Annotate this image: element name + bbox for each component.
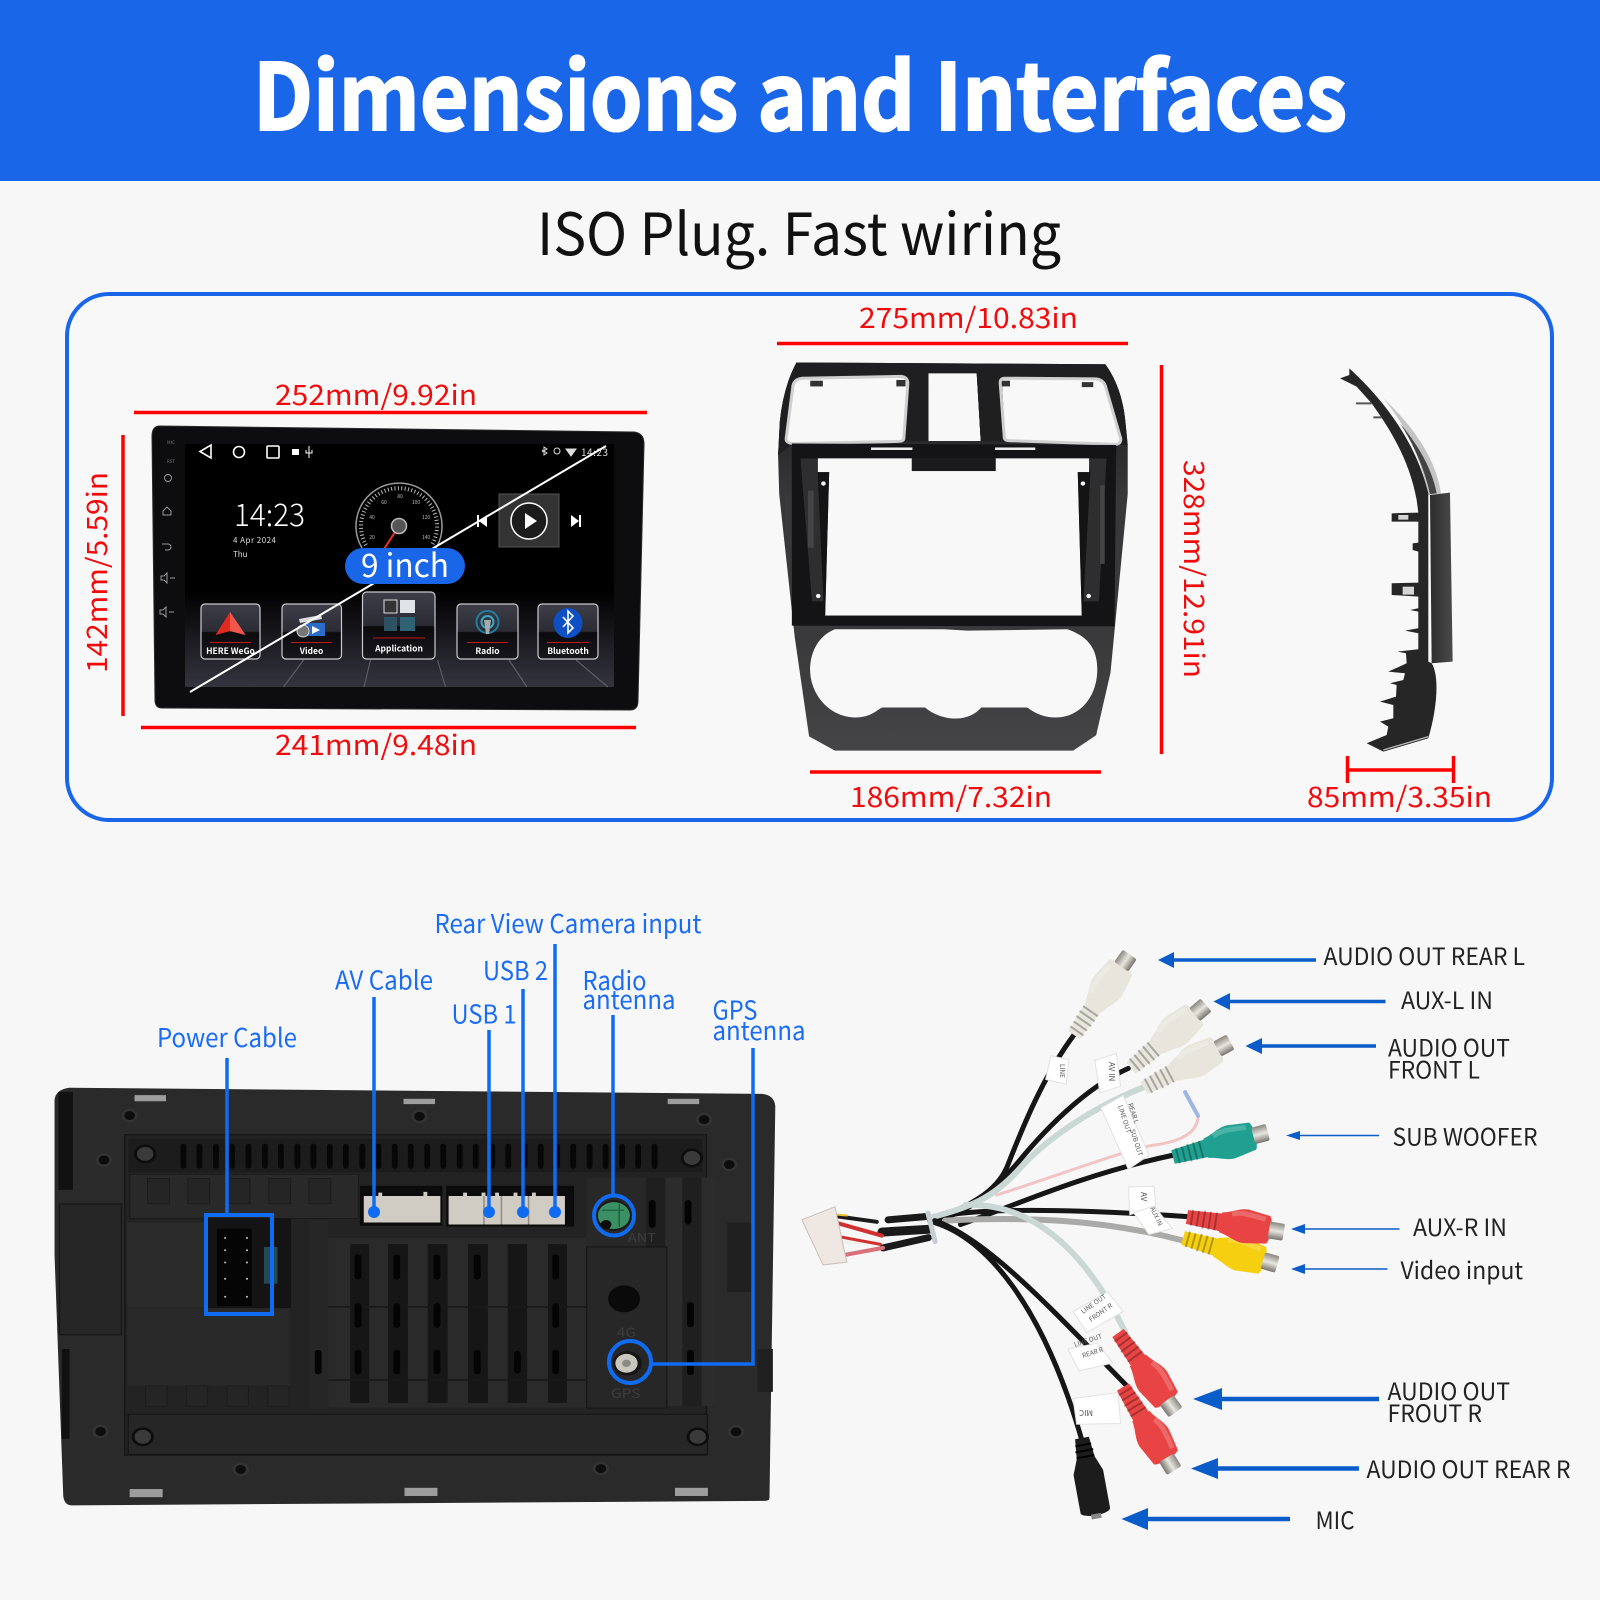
label: AUX-L IN: AUX-L IN [1401, 981, 1493, 1016]
lower left tabs [146, 1386, 289, 1406]
arrow: video input [1291, 1264, 1388, 1274]
side chrome strip [1383, 398, 1441, 495]
arrow: sub woofer [1286, 1131, 1379, 1140]
USB connectors [449, 1193, 565, 1225]
size badge: 9 inch [361, 541, 449, 587]
cable tag text: REAR L [1126, 1102, 1142, 1125]
cable tag text: LINE OUT [1078, 1291, 1108, 1316]
bezel labels [167, 440, 175, 465]
plug: white audio out rear L [1060, 945, 1144, 1045]
callout: USB 2: USB 2 [483, 951, 548, 988]
label: AUDIO OUT FROUT R: AUDIO OUT [1388, 1372, 1510, 1407]
callout: Radio antenna: antenna [582, 980, 676, 1017]
side clip centers [1398, 515, 1414, 595]
arrow: audio out rear R [1191, 1458, 1359, 1479]
side main silhouette [1340, 368, 1436, 752]
callout: USB 1: USB 1 [452, 994, 516, 1032]
left flap [59, 1204, 121, 1335]
plug: white audio out front L [1136, 1027, 1239, 1103]
cable tie [928, 1213, 935, 1242]
cable tag text: SUB OUT [1128, 1128, 1146, 1157]
vent slots [181, 1144, 658, 1169]
label: AUDIO OUT REAR L: AUDIO OUT REAR L [1324, 937, 1525, 972]
status clock: 14:23 [581, 444, 608, 459]
fascia side view [1340, 368, 1453, 752]
right flap [727, 1222, 773, 1392]
plug: white aux L [1120, 992, 1217, 1081]
screen floor glow [185, 590, 614, 687]
label: AUDIO OUT FROUT R [1388, 1372, 1510, 1429]
callout: AV Cable: AV Cable [335, 960, 433, 998]
app tile: Application [362, 592, 435, 659]
cable tag text: AV [1138, 1192, 1149, 1202]
callout: GPS antenna: antenna [712, 1011, 806, 1048]
app tile: Video: Video [299, 645, 323, 657]
fascia frame front view [778, 362, 1128, 751]
cable tag text: LINE OUT [1073, 1330, 1103, 1349]
side lower lip [1383, 737, 1428, 750]
callout: Power Cable [157, 1018, 297, 1314]
title: Dimensions and Interfaces [253, 24, 1347, 157]
callout: Rear View Camera input [434, 904, 702, 1218]
app tile: Bluetooth [538, 604, 598, 659]
cable tag text: LINE OUT [1116, 1104, 1135, 1134]
mounting holes [94, 1110, 743, 1475]
antenna bay [587, 1178, 646, 1247]
arrow: aux R in [1291, 1224, 1400, 1234]
app tile: HERE WeGo [201, 604, 260, 659]
head unit front view [152, 426, 644, 710]
label: AUDIO OUT FROUT R: FROUT R [1388, 1394, 1482, 1429]
dimension: height of unit: 142mm/5.59in [76, 472, 116, 673]
label: AUX-R IN: AUX-R IN [1413, 1208, 1507, 1243]
arrow: aux L in [1214, 993, 1386, 1010]
label: AUDIO OUT FRONT L: AUDIO OUT [1388, 1028, 1510, 1064]
back panel of head unit [55, 1088, 775, 1505]
subtitle: ISO Plug. Fast wiring [537, 188, 1061, 272]
device body [152, 426, 644, 710]
screen [185, 444, 614, 687]
bezel labels: RST [167, 459, 175, 465]
callout: Radio antenna [582, 961, 676, 1236]
bottom band [128, 1414, 707, 1454]
fascia vent hooks [810, 380, 1093, 387]
gps bay [587, 1247, 667, 1408]
fascia top dark band [778, 362, 1128, 455]
plug: yellow video [1178, 1222, 1282, 1281]
callout: Rear View Camera input: Rear View Camera input [434, 904, 702, 941]
dimension: fascia height: 328mm/12.91in [1175, 460, 1215, 678]
callout: GPS antenna: GPS [712, 990, 758, 1028]
label: AUDIO OUT FRONT L [1388, 1028, 1510, 1086]
dimension: fascia bottom width: 186mm/7.32in [850, 776, 1052, 816]
app tile: Radio [457, 604, 518, 659]
side body panel [1430, 493, 1453, 663]
cable tag text: LINE [1058, 1064, 1068, 1078]
dimension: bottom width of unit: 241mm/9.48in [275, 724, 477, 764]
speedometer: 80 [397, 493, 403, 500]
bezel icons [160, 474, 175, 617]
app tile: Video [282, 604, 342, 659]
fascia top tab [912, 458, 996, 471]
socket labels: 4G [617, 1322, 636, 1341]
callout: AV Cable [335, 960, 433, 1218]
speedometer: 140 [422, 534, 430, 541]
arrow: audio out front L [1246, 1038, 1376, 1054]
dimension: fascia top width: 275mm/10.83in [859, 297, 1078, 337]
inner recess [125, 1135, 706, 1455]
AV connector [364, 1192, 440, 1222]
arrow: audio out rear L [1158, 952, 1316, 968]
speedometer: 20 [369, 534, 375, 541]
label: MIC: MIC [1316, 1501, 1354, 1536]
app tile: Application: Application [374, 642, 423, 654]
app tile: Radio: Radio [475, 645, 500, 657]
socket labels [611, 1227, 656, 1403]
label: Video input: Video input [1400, 1251, 1523, 1286]
header banner [0, 0, 1600, 181]
screws [133, 1146, 707, 1445]
status bar icons [542, 447, 576, 456]
callout: USB 1 [452, 994, 516, 1218]
dimension: depth: 85mm/3.35in [1307, 776, 1492, 816]
side chrome shadow [1400, 423, 1437, 494]
fascia inner rim [792, 444, 1116, 626]
speedometer: 120 [422, 514, 430, 521]
callout: GPS antenna [609, 990, 806, 1383]
upper shelf [130, 1174, 358, 1218]
left connector block [127, 1222, 205, 1307]
wiring harness [802, 1035, 1198, 1440]
chrome tabs [130, 1095, 708, 1497]
fascia slot surrounds [904, 374, 1005, 441]
radio antenna socket [595, 1200, 632, 1231]
plug: red audio out rear R [1109, 1378, 1189, 1479]
app tile: HERE WeGo: HERE WeGo [206, 645, 255, 657]
socket labels: ANT [628, 1227, 656, 1246]
cable tag text [1058, 1062, 1166, 1418]
speedometer: 40 [369, 514, 375, 521]
fascia side slots [808, 485, 1105, 564]
bezel labels: MIC [167, 440, 175, 446]
cable tag text: FRONT R [1086, 1300, 1114, 1324]
callout: Power Cable: Power Cable [157, 1018, 297, 1055]
panel: dimensions [67, 294, 1552, 820]
power connector bay [205, 1218, 291, 1308]
connector bay dark [360, 1186, 574, 1227]
date: 4 Apr 2024 [233, 535, 277, 546]
nav bar icons [200, 445, 312, 458]
weekday: Thu [233, 549, 248, 560]
clock: 14:23 [234, 490, 305, 535]
side pins [1356, 403, 1382, 417]
fascia chrome vent trim [786, 376, 1121, 444]
speedometer [356, 483, 442, 549]
plug: red aux R [1184, 1200, 1286, 1249]
music player [477, 494, 581, 547]
harness connector [802, 1207, 847, 1265]
speedometer: 100 [412, 499, 420, 506]
fascia bracket holes [816, 481, 1091, 598]
dimension: top width of unit: 252mm/9.92in [275, 374, 477, 414]
fascia highlights [871, 447, 1035, 450]
harness wires [828, 1035, 1198, 1440]
cable tag text: REAR R [1081, 1344, 1104, 1360]
diagonal line [190, 446, 606, 692]
speedometer: 60 [381, 499, 387, 506]
cable tag text: MIC [1079, 1407, 1093, 1418]
cable tags [1046, 1053, 1172, 1424]
plug: black mic [1067, 1435, 1112, 1521]
right rib block [646, 1178, 719, 1406]
arrow: audio out front R [1193, 1388, 1379, 1410]
socket labels: GPS [611, 1383, 641, 1403]
lower left block [127, 1308, 290, 1386]
fascia bracket strips [800, 459, 1106, 601]
callout: Radio antenna: Radio [582, 961, 646, 998]
cable tag text: AV IN [1106, 1062, 1117, 1081]
app tile: Bluetooth: Bluetooth [547, 645, 589, 657]
left edge strips [58, 1092, 73, 1439]
power connector [217, 1229, 278, 1306]
gps socket [613, 1351, 642, 1376]
callout: USB 2 [483, 951, 548, 1218]
label: AUDIO OUT FRONT L: FRONT L [1388, 1050, 1480, 1086]
floor perspective lines [284, 660, 608, 687]
dimension: depth [1307, 756, 1492, 816]
cable tag text: AUX IN [1148, 1205, 1166, 1227]
plug: red audio out front R [1104, 1323, 1189, 1422]
plug: teal sub woofer [1169, 1116, 1272, 1173]
connector dividers [484, 1196, 529, 1225]
arrow: mic [1122, 1508, 1290, 1530]
label: AUDIO OUT REAR R: AUDIO OUT REAR R [1366, 1450, 1570, 1485]
vent band [128, 1139, 703, 1172]
label: SUB WOOFER: SUB WOOFER [1392, 1118, 1538, 1152]
ribbed area [309, 1220, 588, 1408]
